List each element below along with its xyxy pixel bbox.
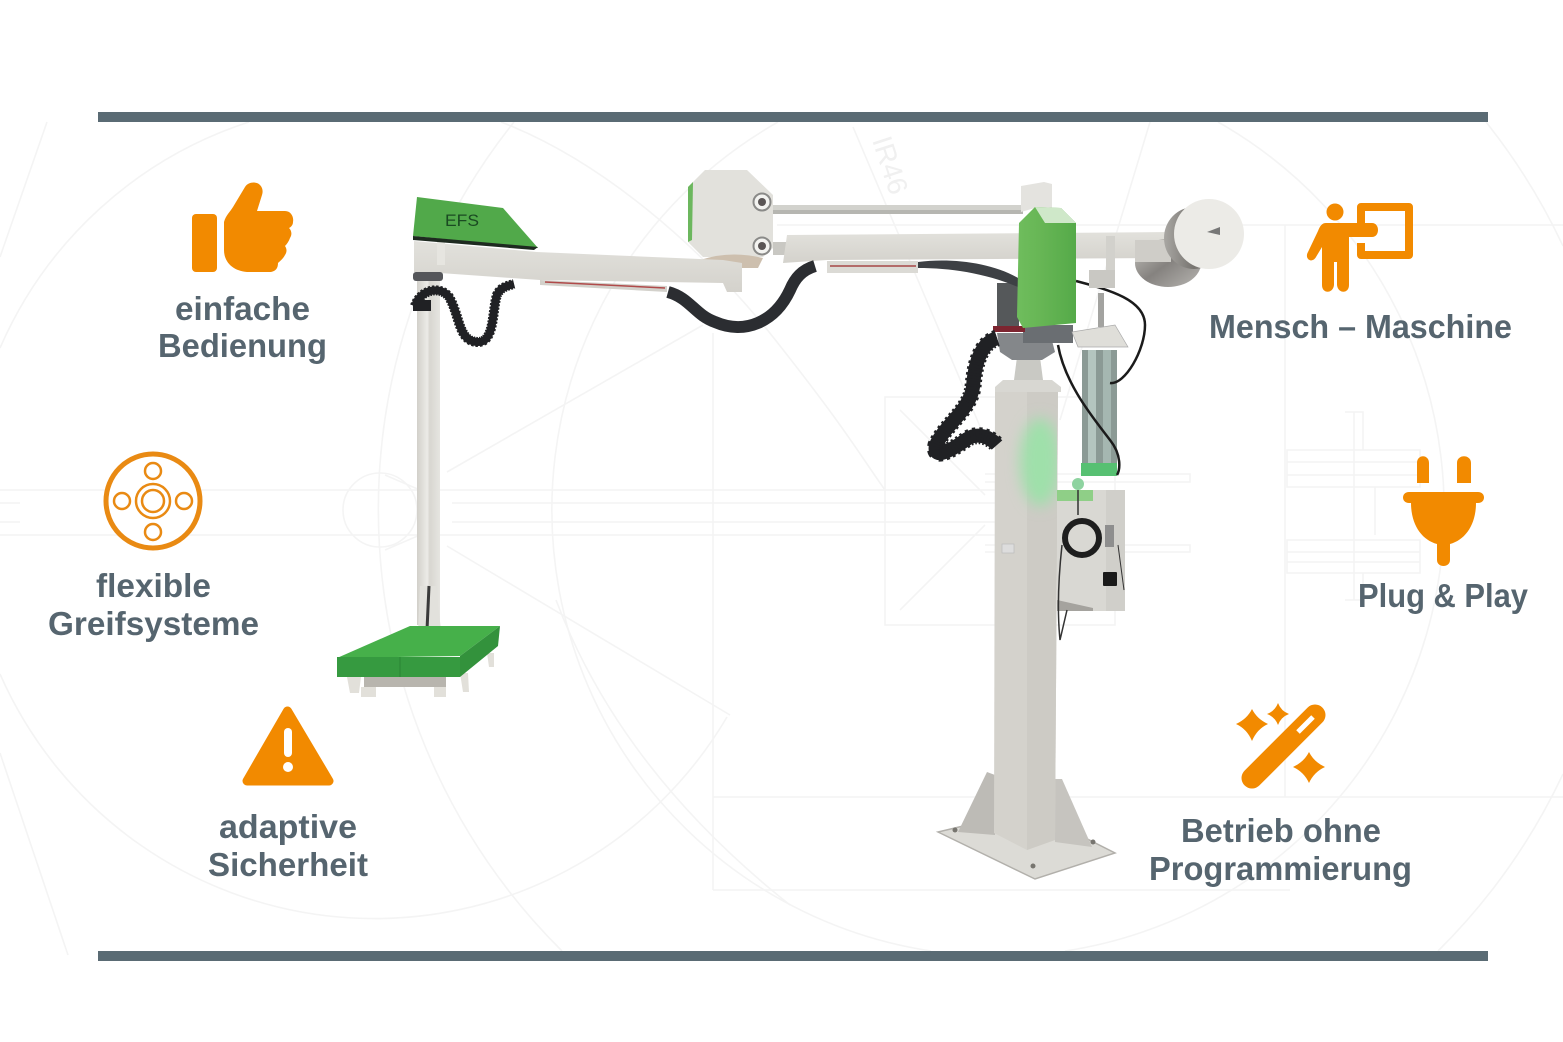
top rule [98,112,1488,122]
label: Betrieb ohne [1181,812,1381,849]
label [208,808,368,883]
pillar base plate [938,772,1115,879]
counterweight [1135,199,1244,287]
middle cable chain [668,266,815,327]
feature: adaptive Sicherheit [208,711,368,883]
pillar [994,333,1061,850]
label: Programmierung [1149,850,1412,887]
right cable chain [936,338,997,453]
label: Sicherheit [208,846,368,883]
icon: warning triangle [247,711,329,781]
control box [1057,478,1125,640]
feature: einfache Bedienung [158,183,327,364]
label: einfache [175,290,310,327]
feature: Betrieb ohne Programmierung [1149,703,1412,887]
feature: flexible Greifsysteme [48,454,259,642]
bottom rule [98,951,1488,961]
label: Mensch – Maschine [1209,308,1512,345]
top bracket [1021,182,1052,212]
icon: thumbs up [192,183,293,272]
label [158,290,327,364]
icon: power plug [1403,456,1484,566]
green gripper plate [337,626,500,697]
machine: EFS manipulator [337,170,1244,879]
icon: person at screen [1307,204,1409,292]
label [1149,812,1412,887]
label [48,567,259,642]
label: flexible [96,567,211,604]
label: Bedienung [158,327,327,364]
swivel joint [993,283,1073,343]
background: technical drawing lines [0,122,1563,955]
air hoses [1058,281,1145,475]
label: Plug & Play [1358,577,1529,614]
front arm [413,241,742,292]
feature: Mensch – Maschine [1209,204,1512,345]
pneumatic cylinder [1072,293,1128,476]
icon: gripper circle [106,454,200,548]
rear beam [773,205,1170,288]
housing top highlight [1035,207,1076,223]
logo: EFS [445,211,479,230]
icon: magic wand [1236,703,1325,783]
upper joint plate [688,170,773,268]
left cable chain [413,284,514,342]
vertical mast [417,281,441,632]
label: Greifsysteme [48,605,259,642]
background drawing annotation: IR46 [866,132,914,198]
label: adaptive [219,808,357,845]
green housing [1017,207,1076,328]
green head cover [413,197,538,250]
feature: Plug & Play [1358,456,1529,614]
